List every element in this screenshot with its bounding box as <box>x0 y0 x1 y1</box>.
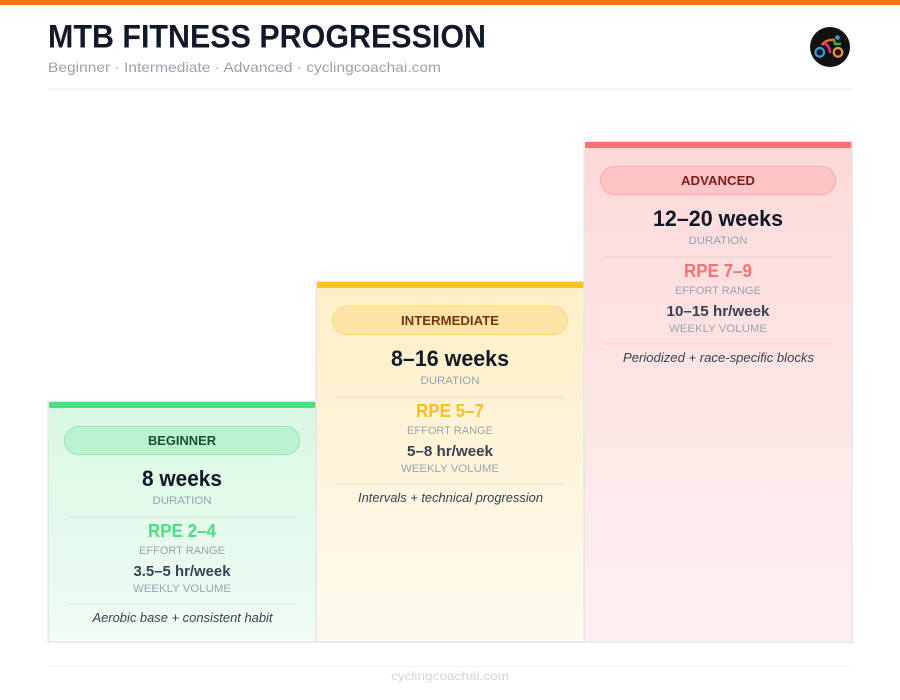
advanced duration <box>653 206 783 247</box>
beginner weekly volume: WEEKLY VOLUME <box>133 583 231 595</box>
intermediate top bar <box>317 282 583 288</box>
title: MTB FITNESS PROGRESSION <box>48 18 486 54</box>
beginner note: Aerobic base + consistent habit <box>91 611 273 625</box>
subtitle: Beginner · Intermediate · Advanced · cyclingcoachai.com <box>48 59 441 75</box>
intermediate level pill <box>332 306 568 334</box>
intermediate effort range: EFFORT RANGE <box>407 425 493 437</box>
beginner weekly volume <box>133 563 231 595</box>
intermediate effort range: RPE 5–7 <box>416 401 484 421</box>
advanced top bar <box>585 142 851 148</box>
intermediate weekly volume <box>401 443 499 475</box>
panel: intermediate <box>316 282 584 642</box>
beginner level pill: BEGINNER <box>148 433 217 448</box>
beginner effort range <box>139 521 225 557</box>
intermediate weekly volume: 5–8 hr/week <box>407 443 494 460</box>
advanced duration: 12–20 weeks <box>653 206 783 231</box>
advanced weekly volume <box>666 303 770 335</box>
advanced weekly volume: 10–15 hr/week <box>666 303 770 320</box>
beginner top bar <box>49 402 315 408</box>
advanced level pill <box>600 166 836 194</box>
panel: beginner <box>48 402 316 642</box>
advanced weekly volume: WEEKLY VOLUME <box>669 323 767 335</box>
advanced effort range: EFFORT RANGE <box>675 285 761 297</box>
intermediate weekly volume: WEEKLY VOLUME <box>401 463 499 475</box>
beginner effort range: EFFORT RANGE <box>139 545 225 557</box>
footer: cyclingcoachai.com <box>391 669 509 683</box>
icon: cyclist logo <box>810 27 850 67</box>
panel: advanced <box>584 142 852 642</box>
advanced effort range: RPE 7–9 <box>684 261 752 281</box>
beginner level pill <box>64 426 300 454</box>
intermediate effort range <box>407 401 493 437</box>
top accent bar <box>0 0 900 5</box>
beginner effort range: RPE 2–4 <box>148 521 216 541</box>
advanced note: Periodized + race-specific blocks <box>623 351 814 365</box>
beginner duration: DURATION <box>152 495 212 507</box>
advanced duration: DURATION <box>688 235 748 247</box>
beginner weekly volume: 3.5–5 hr/week <box>134 563 231 580</box>
intermediate level pill: INTERMEDIATE <box>401 313 499 328</box>
beginner duration: 8 weeks <box>142 466 222 491</box>
beginner duration <box>142 466 222 507</box>
intermediate duration <box>391 346 509 387</box>
advanced level pill: ADVANCED <box>681 173 755 188</box>
intermediate note: Intervals + technical progression <box>358 491 543 505</box>
intermediate duration: DURATION <box>420 375 480 387</box>
advanced effort range <box>675 261 761 297</box>
intermediate duration: 8–16 weeks <box>391 346 509 371</box>
